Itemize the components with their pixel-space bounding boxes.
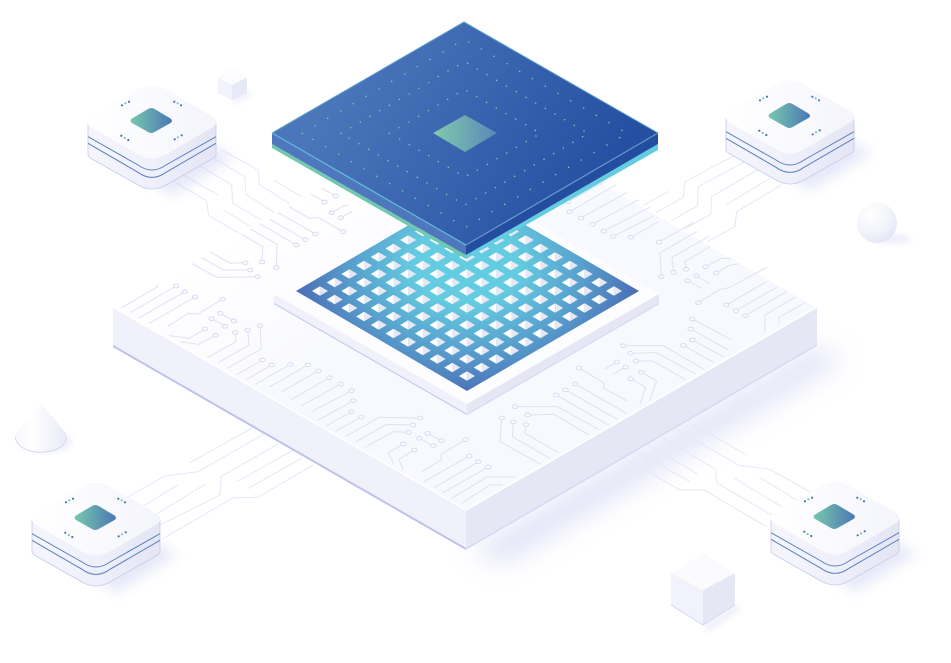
on-board traces: lower right — [500, 182, 805, 464]
grid background — [296, 191, 639, 391]
chip right face — [466, 133, 658, 255]
board left face — [113, 307, 466, 549]
module: bottom left — [32, 483, 178, 593]
board right face — [466, 307, 817, 549]
on-board traces: lower left — [122, 284, 515, 503]
contact grid — [296, 222, 639, 391]
contact pads, 11 by 11 — [312, 228, 622, 381]
cone, left — [16, 403, 72, 452]
riser top surface — [274, 183, 659, 404]
chip underside right — [466, 144, 658, 259]
off-board traces: bottom-right module — [624, 422, 810, 527]
chip centre square — [433, 115, 497, 152]
on-board traces: upper left — [192, 188, 352, 277]
chip top face — [272, 22, 658, 245]
off-board traces: bottom-left module — [128, 428, 313, 538]
riser right face — [467, 294, 659, 414]
main circuit board — [113, 104, 817, 549]
riser left face — [274, 294, 467, 414]
module: top right — [726, 81, 872, 191]
module: bottom right — [770, 482, 917, 592]
board drop shadow — [470, 348, 842, 562]
sphere, right — [857, 203, 911, 244]
chip dot rings — [302, 42, 622, 227]
off-board traces: top-right module — [644, 156, 782, 242]
small cube, top — [218, 68, 252, 104]
off-board traces: top-left module — [173, 150, 302, 233]
board top surface — [113, 104, 817, 510]
module: top left — [88, 86, 234, 196]
chip underside left — [272, 144, 466, 259]
chip left face — [272, 133, 466, 255]
large cube, bottom — [671, 553, 742, 632]
top processor chip — [272, 22, 658, 259]
central riser plate — [274, 183, 659, 414]
